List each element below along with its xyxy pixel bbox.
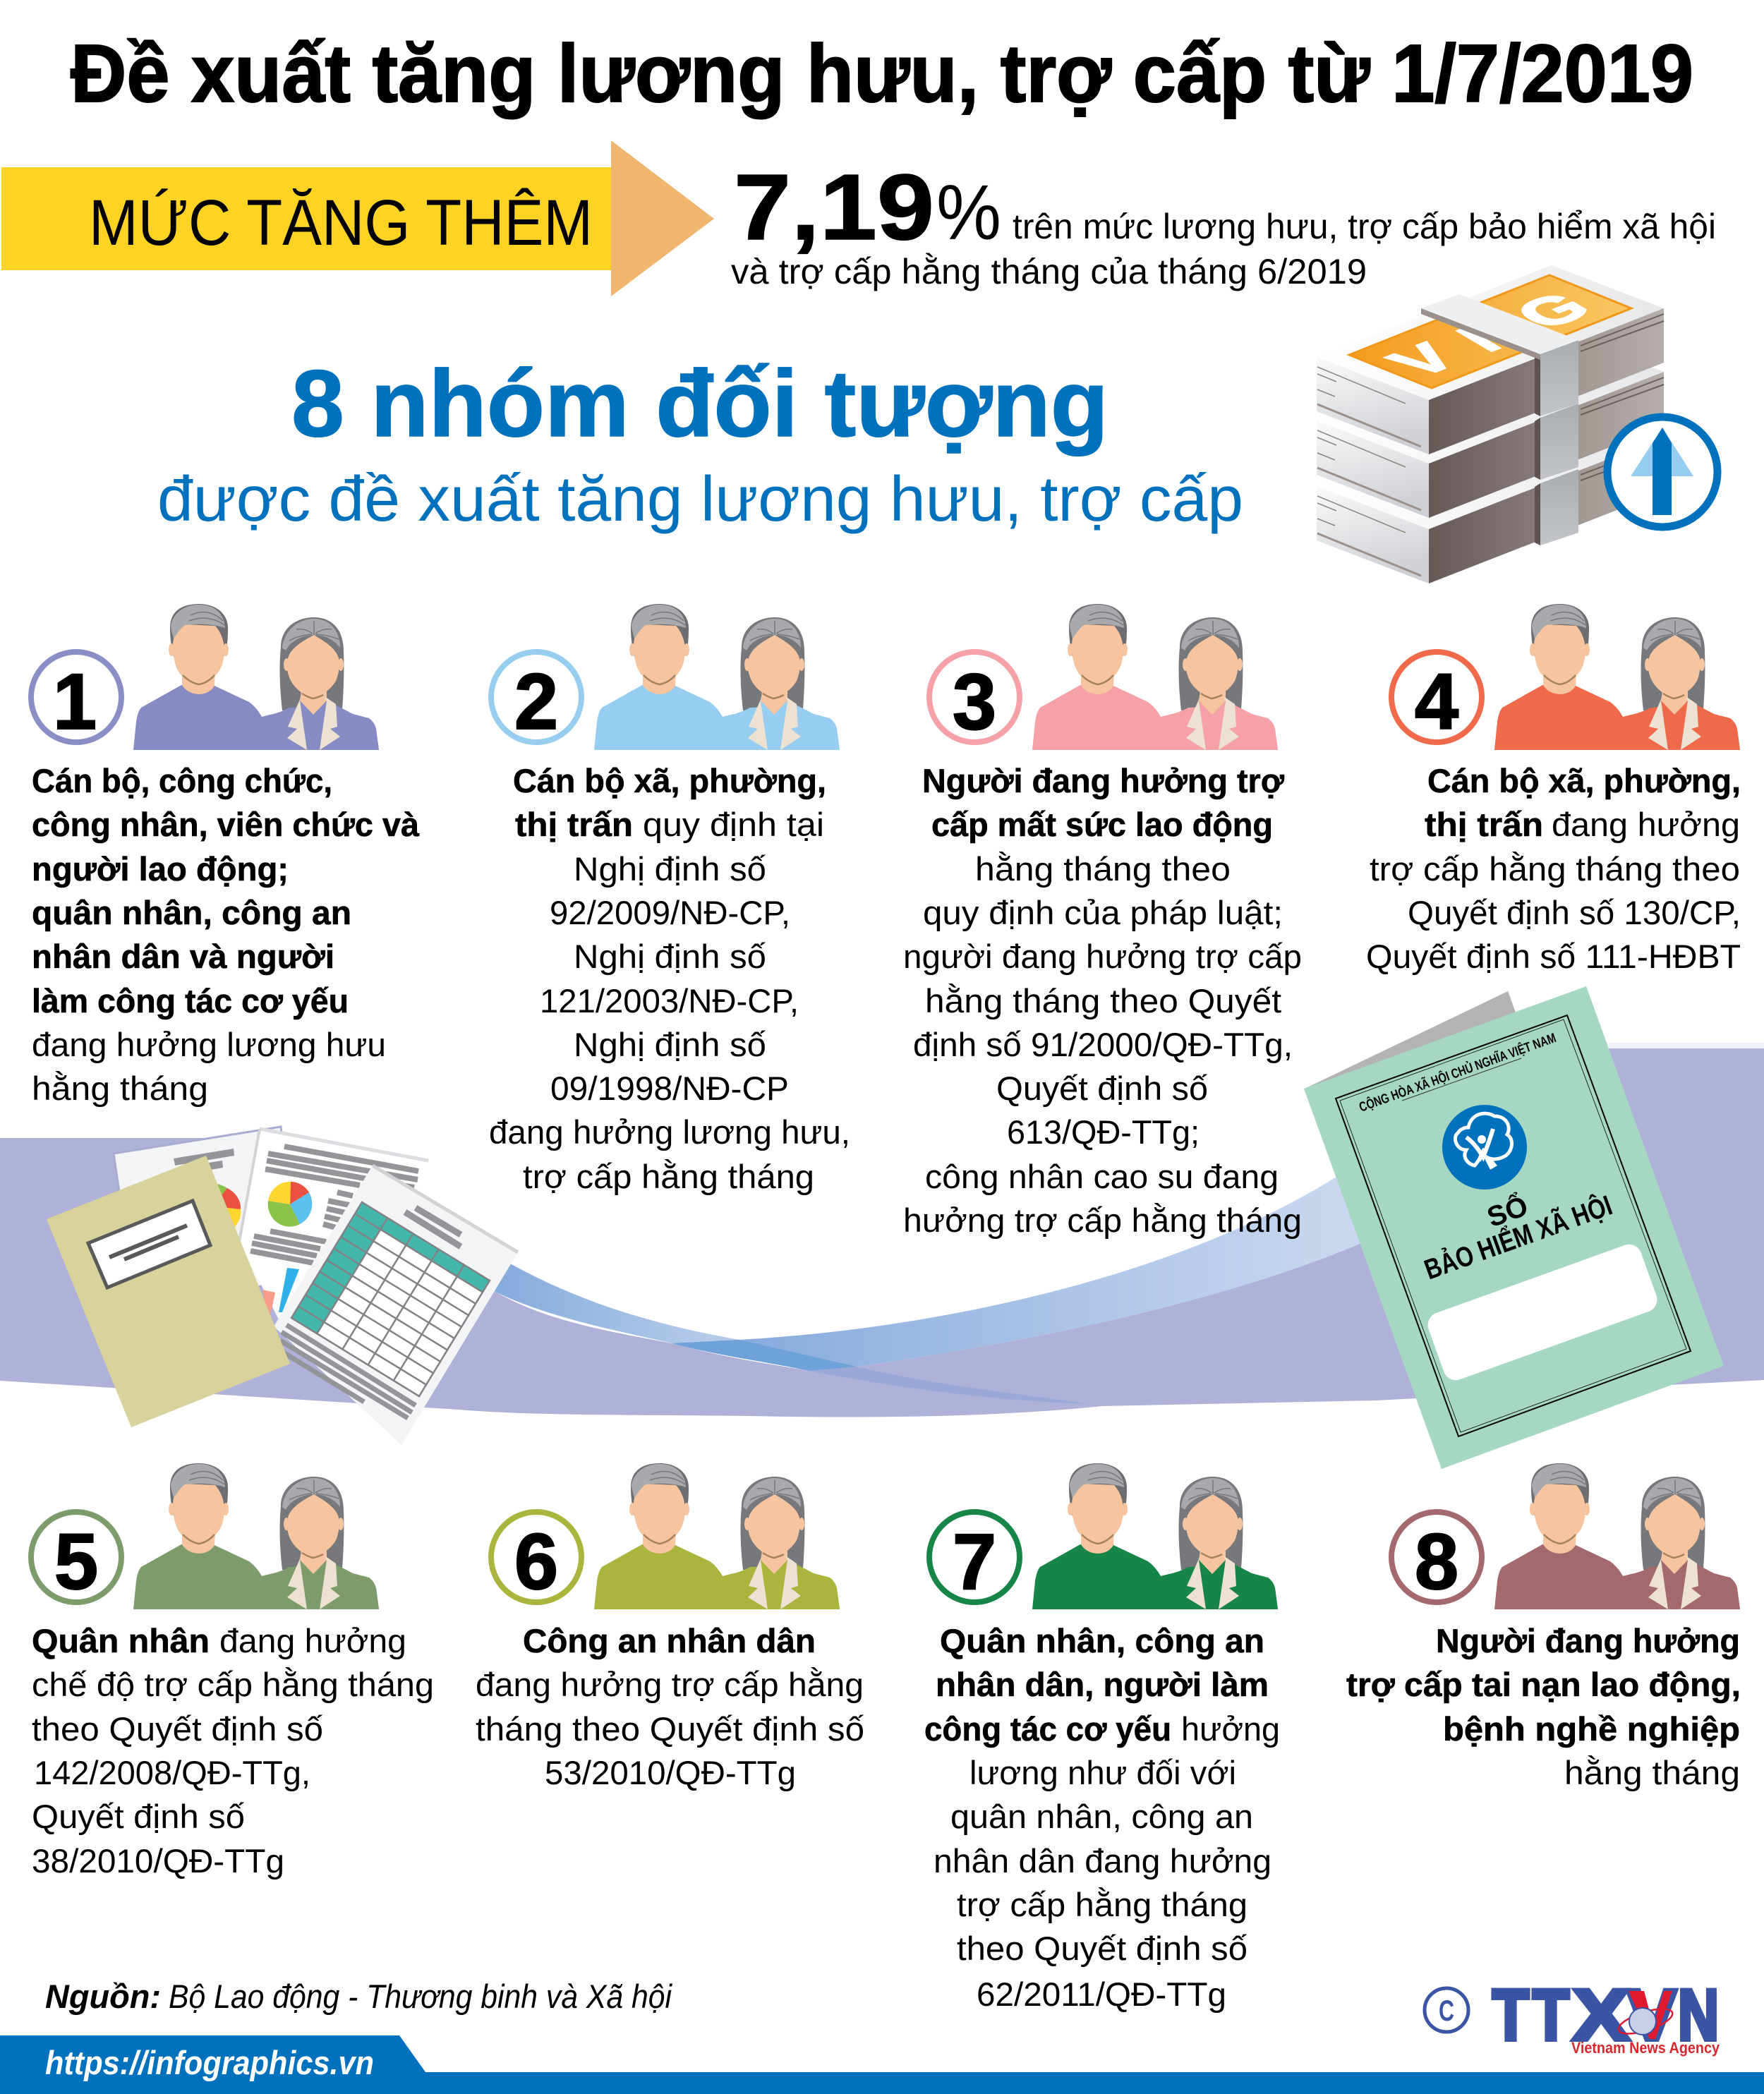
text block 2: 09/1998/NĐ-CP	[550, 1070, 789, 1107]
text block 7	[924, 1622, 1280, 2013]
text block 4: thị trấn	[1425, 806, 1543, 843]
logo: TTXVN: T	[1492, 1975, 1529, 2055]
text block 6: 53/2010/QĐ-TTg	[545, 1754, 796, 1791]
icon: money stack: V	[1375, 336, 1473, 385]
text block 5: Quân nhân	[32, 1622, 210, 1659]
icon: social insurance book: SỔ	[1482, 1188, 1532, 1233]
icon: badge 2: 2	[514, 658, 558, 746]
text block 8: bệnh nghề nghiệp	[1443, 1710, 1740, 1748]
text block 2: đang hưởng lương hưu,	[489, 1113, 850, 1151]
callout: 7,19%	[731, 155, 1716, 291]
text block 4: Quyết định số 111-HĐBT	[1366, 938, 1741, 975]
source note: Nguồn:	[45, 1978, 161, 2015]
icon: badge 6: 6	[514, 1518, 558, 1606]
source note: Bộ Lao động - Thương binh và Xã hội	[169, 1978, 672, 2015]
text block 1: quân nhân, công an	[32, 894, 351, 931]
text block 7: quân nhân, công an	[950, 1798, 1253, 1835]
text block 7: nhân dân đang hưởng	[934, 1842, 1271, 1880]
callout: 7,19%: 7,19	[734, 155, 934, 259]
panel: group 6	[476, 1463, 864, 1791]
logo: TTXVN: Vietnam News Agency	[1571, 2039, 1720, 2057]
icon: social insurance book: CỘNG HÒA XÃ HỘI CHỦ NGHĨA VIỆT NAM	[1357, 1030, 1558, 1115]
text block 6: Công an nhân dân	[523, 1622, 816, 1659]
icon: couple 7	[1032, 1463, 1278, 1609]
logo: TTXVN: C	[1439, 1994, 1454, 2027]
icon: badge 1	[31, 652, 121, 746]
text block 2: quy định tại	[643, 806, 824, 843]
text block 7: lương như đối với	[969, 1754, 1236, 1791]
panel: group 5	[31, 1463, 434, 1880]
text block 3: hưởng trợ cấp hằng tháng	[903, 1202, 1302, 1239]
panel: group 7	[924, 1463, 1280, 2013]
text block 5: theo Quyết định số	[32, 1710, 323, 1748]
text block 4: Cán bộ xã, phường,	[1427, 762, 1741, 799]
text block 3: Quyết định số	[996, 1070, 1208, 1107]
panel: group 1	[31, 604, 420, 1107]
logo: TTXVN: N	[1678, 1975, 1719, 2055]
text block 2: trợ cấp hằng tháng	[523, 1158, 814, 1195]
text block 2: thị trấn	[515, 806, 633, 843]
text block 3: định số 91/2000/QĐ-TTg,	[913, 1026, 1293, 1063]
text block 6	[476, 1622, 864, 1791]
text block 3: 613/QĐ-TTg;	[1007, 1113, 1200, 1151]
text block 1: nhân dân và người	[32, 938, 334, 975]
text block 1: làm công tác cơ yếu	[32, 982, 349, 1019]
text block 4: Quyết định số 130/CP,	[1408, 894, 1741, 931]
icon: money stack: N	[1443, 309, 1545, 359]
icon: couple 2	[594, 604, 840, 750]
footer bar: https://infographics.vn	[45, 2044, 374, 2081]
text block 6: đang hưởng trợ cấp hằng	[476, 1666, 864, 1703]
text block 2: Nghị định số	[574, 938, 766, 975]
callout: 7,19%: %	[936, 169, 1001, 256]
icon: badge 7	[929, 1512, 1020, 1606]
title: Đề xuất tăng lương hưu, trợ cấp từ 1/7/2019	[71, 28, 1693, 119]
icon: badge 4	[1391, 652, 1482, 746]
icon: couple 5	[133, 1463, 379, 1609]
icon: badge 8	[1391, 1512, 1482, 1606]
icon: badge 5: 5	[54, 1518, 98, 1606]
text block 8	[1346, 1622, 1741, 1791]
text block 2: 121/2003/NĐ-CP,	[540, 982, 799, 1019]
icon: social insurance book: BẢO HIỂM XÃ HỘI	[1420, 1188, 1617, 1285]
text block 8: trợ cấp tai nạn lao động,	[1346, 1666, 1741, 1703]
text block 2: 92/2009/NĐ-CP,	[550, 894, 790, 931]
text block 5: 142/2008/QĐ-TTg,	[34, 1754, 310, 1791]
text block 3: công nhân cao su đang	[925, 1158, 1279, 1195]
icon: badge 8: 8	[1415, 1518, 1458, 1606]
icon: money stack: G	[1501, 285, 1606, 337]
icon: up arrow in circle	[1607, 417, 1717, 527]
text block 7: Quân nhân, công an	[940, 1622, 1264, 1659]
icon: badge 3	[929, 652, 1020, 746]
icon: badge 1: 1	[53, 658, 97, 746]
text block 5: chế độ trợ cấp hằng tháng	[32, 1666, 434, 1703]
text block 4: đang hưởng	[1552, 806, 1740, 843]
text block 7: hưởng	[1181, 1710, 1280, 1748]
text block 3	[903, 762, 1302, 1239]
text block 3: Người đang hưởng trợ	[922, 762, 1285, 799]
text block 2: Cán bộ xã, phường,	[513, 762, 826, 799]
text block 5: đang hưởng	[219, 1622, 406, 1659]
text block 5	[32, 1622, 434, 1880]
heading: 8 nhóm đối tượng: được đề xuất tăng lương hưu, trợ cấp	[157, 464, 1243, 535]
icon: couple 1	[133, 604, 379, 750]
text block 3: người đang hưởng trợ cấp	[903, 938, 1302, 975]
heading: 8 nhóm đối tượng: 8 nhóm đối tượng	[291, 351, 1108, 456]
text block 1: hằng tháng	[32, 1070, 208, 1107]
text block 1: công nhân, viên chức và	[32, 806, 420, 843]
icon: badge 6	[491, 1512, 581, 1606]
footer bar	[0, 2035, 1764, 2094]
icon: badge 7: 7	[953, 1518, 996, 1606]
text block 1: đang hưởng lương hưu	[32, 1026, 386, 1063]
text block 1	[32, 762, 420, 1107]
text block 8: hằng tháng	[1564, 1754, 1740, 1791]
callout: 7,19%: trên mức lương hưu, trợ cấp bảo hiểm xã hội	[1013, 207, 1716, 246]
icon: money stack	[1317, 265, 1664, 583]
panel: group 8	[1346, 1463, 1741, 1791]
text block 7: theo Quyết định số	[957, 1930, 1248, 1967]
text block 3: cấp mất sức lao động	[931, 806, 1273, 843]
heading: 8 nhóm đối tượng	[157, 351, 1243, 535]
text block 4: trợ cấp hằng tháng theo	[1370, 850, 1740, 888]
icon: couple 3	[1032, 604, 1278, 750]
text block 5: 38/2010/QĐ-TTg	[32, 1842, 284, 1880]
logo: TTXVN: V	[1627, 1975, 1677, 2055]
text block 4	[1366, 762, 1741, 975]
text block 1: người lao động;	[32, 850, 289, 888]
background swoosh	[0, 1043, 1764, 1417]
banner: mức tăng thêm: MỨC TĂNG THÊM	[89, 187, 593, 259]
icon: documents	[47, 1127, 518, 1445]
icon: couple 8	[1494, 1463, 1740, 1609]
text block 6: tháng theo Quyết định số	[476, 1710, 864, 1748]
text block 2	[489, 762, 850, 1195]
text block 7: trợ cấp hằng tháng	[957, 1886, 1248, 1923]
text block 7: 62/2011/QĐ-TTg	[977, 1975, 1226, 2013]
text block 5: Quyết định số	[32, 1798, 245, 1835]
text block 1: Cán bộ, công chức,	[32, 762, 332, 799]
panel: group 4	[1366, 604, 1741, 975]
logo: TTXVN	[1425, 1975, 1720, 2057]
text block 7: nhân dân, người làm	[936, 1666, 1269, 1703]
text block 2: Nghị định số	[574, 1026, 766, 1063]
logo: TTXVN: X	[1573, 1975, 1629, 2055]
text block 2: Nghị định số	[574, 850, 766, 888]
icon: badge 2	[491, 652, 581, 746]
icon: badge 5	[31, 1512, 121, 1606]
text block 8: Người đang hưởng	[1436, 1622, 1740, 1659]
panel: group 3	[903, 604, 1302, 1239]
panel: group 2	[489, 604, 850, 1195]
icon: badge 3: 3	[953, 658, 996, 746]
icon: social insurance book	[1304, 986, 1724, 1469]
icon: couple 4	[1494, 604, 1740, 750]
text block 3: hằng tháng theo Quyết	[925, 982, 1281, 1019]
text block 7: công tác cơ yếu	[924, 1710, 1171, 1748]
text block 3: hằng tháng theo	[975, 850, 1231, 888]
callout: 7,19%: và trợ cấp hằng tháng của tháng 6/2019	[731, 252, 1367, 291]
icon: couple 6	[594, 1463, 840, 1609]
banner: mức tăng thêm	[1, 140, 714, 296]
icon: badge 4: 4	[1415, 658, 1458, 746]
text block 3: quy định của pháp luật;	[923, 894, 1283, 931]
logo: TTXVN: T	[1533, 1975, 1569, 2055]
